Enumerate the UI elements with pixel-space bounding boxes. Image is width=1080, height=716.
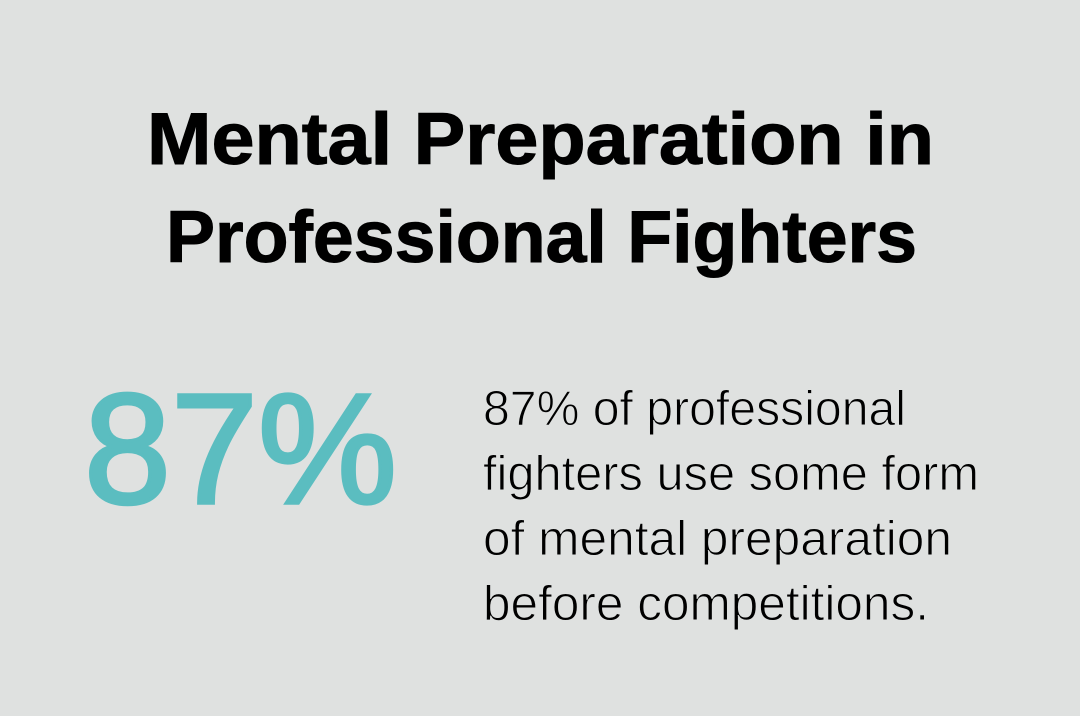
- description text: fighters use some form: [483, 447, 979, 501]
- title: Professional Fighters: [166, 197, 917, 278]
- title: Mental Preparation in: [147, 99, 934, 180]
- description text: of mental preparation: [483, 512, 952, 566]
- big statistic: 87%: 87%: [84, 362, 397, 537]
- description text: 87% of professional: [483, 382, 906, 436]
- description text: [483, 382, 979, 631]
- description text: before competitions.: [483, 577, 929, 631]
- title: [147, 99, 934, 278]
